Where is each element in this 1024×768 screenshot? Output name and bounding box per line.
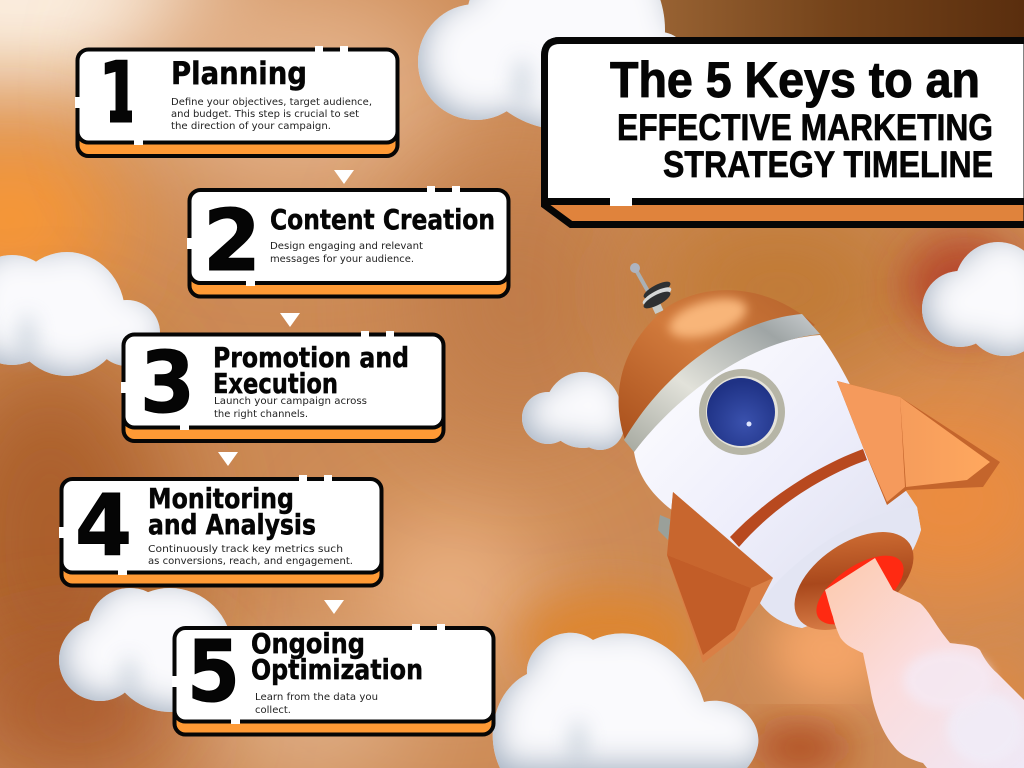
description: Define your objectives, target audience,	[171, 97, 372, 108]
heading	[213, 341, 409, 400]
description	[255, 692, 378, 716]
description: Launch your campaign across	[214, 396, 367, 407]
heading: Ongoing	[251, 627, 365, 660]
cloud: bottom centre	[493, 633, 758, 768]
number 4: 4	[75, 477, 132, 576]
description: Continuously track key metrics such	[148, 544, 343, 555]
right fin	[837, 381, 1000, 505]
silver band	[624, 314, 820, 452]
heading	[251, 627, 423, 686]
description: the direction of your campaign.	[171, 121, 331, 132]
cloud: top centre	[418, 0, 688, 130]
description: messages for your audience.	[270, 254, 414, 265]
cloud: lower left	[59, 588, 232, 712]
rocket body	[634, 335, 921, 628]
description	[214, 396, 367, 420]
step 2 card	[187, 186, 508, 296]
step 5 card	[172, 623, 494, 734]
heading: Optimization	[251, 653, 423, 686]
heading: Planning	[171, 56, 307, 92]
arrow 2 to 3	[280, 313, 300, 327]
rocket	[619, 263, 1024, 768]
description: as conversions, reach, and engagement.	[148, 556, 353, 567]
title line 1: The 5 Keys to an	[610, 52, 980, 108]
cloud: middle	[522, 372, 624, 450]
description	[148, 544, 353, 567]
step 3 card	[121, 331, 444, 441]
red stripe	[730, 449, 867, 547]
heading	[148, 482, 316, 541]
heading: Content Creation	[270, 203, 495, 236]
exhaust flame	[825, 558, 1024, 768]
antenna	[630, 263, 673, 314]
left fin	[667, 492, 773, 663]
rocket dome	[619, 290, 815, 440]
description	[270, 241, 423, 265]
number 5: 5	[187, 623, 240, 722]
description: Design engaging and relevant	[270, 241, 423, 252]
cloud: left	[0, 252, 160, 376]
number 1: 1	[98, 44, 142, 143]
title panel	[544, 40, 1024, 224]
nozzle	[760, 507, 931, 650]
heading: and Analysis	[148, 508, 316, 541]
description: collect.	[255, 705, 291, 716]
rear back nub	[658, 515, 672, 540]
cloud: upper right	[922, 242, 1024, 356]
description: Learn from the data you	[255, 692, 378, 703]
step 4 card	[59, 475, 382, 586]
description: and budget. This step is crucial to set	[171, 109, 359, 120]
arrow 1 to 2	[334, 170, 354, 184]
arrow 3 to 4	[218, 452, 238, 466]
heading: Execution	[213, 367, 338, 400]
step 1 card	[75, 44, 398, 156]
porthole	[699, 369, 785, 455]
heading: Monitoring	[148, 482, 294, 515]
description: the right channels.	[214, 409, 308, 420]
arrow 4 to 5	[324, 600, 344, 614]
number 3: 3	[140, 334, 195, 433]
description	[171, 97, 372, 132]
heading: Promotion and	[213, 341, 409, 374]
number 2: 2	[203, 192, 261, 291]
